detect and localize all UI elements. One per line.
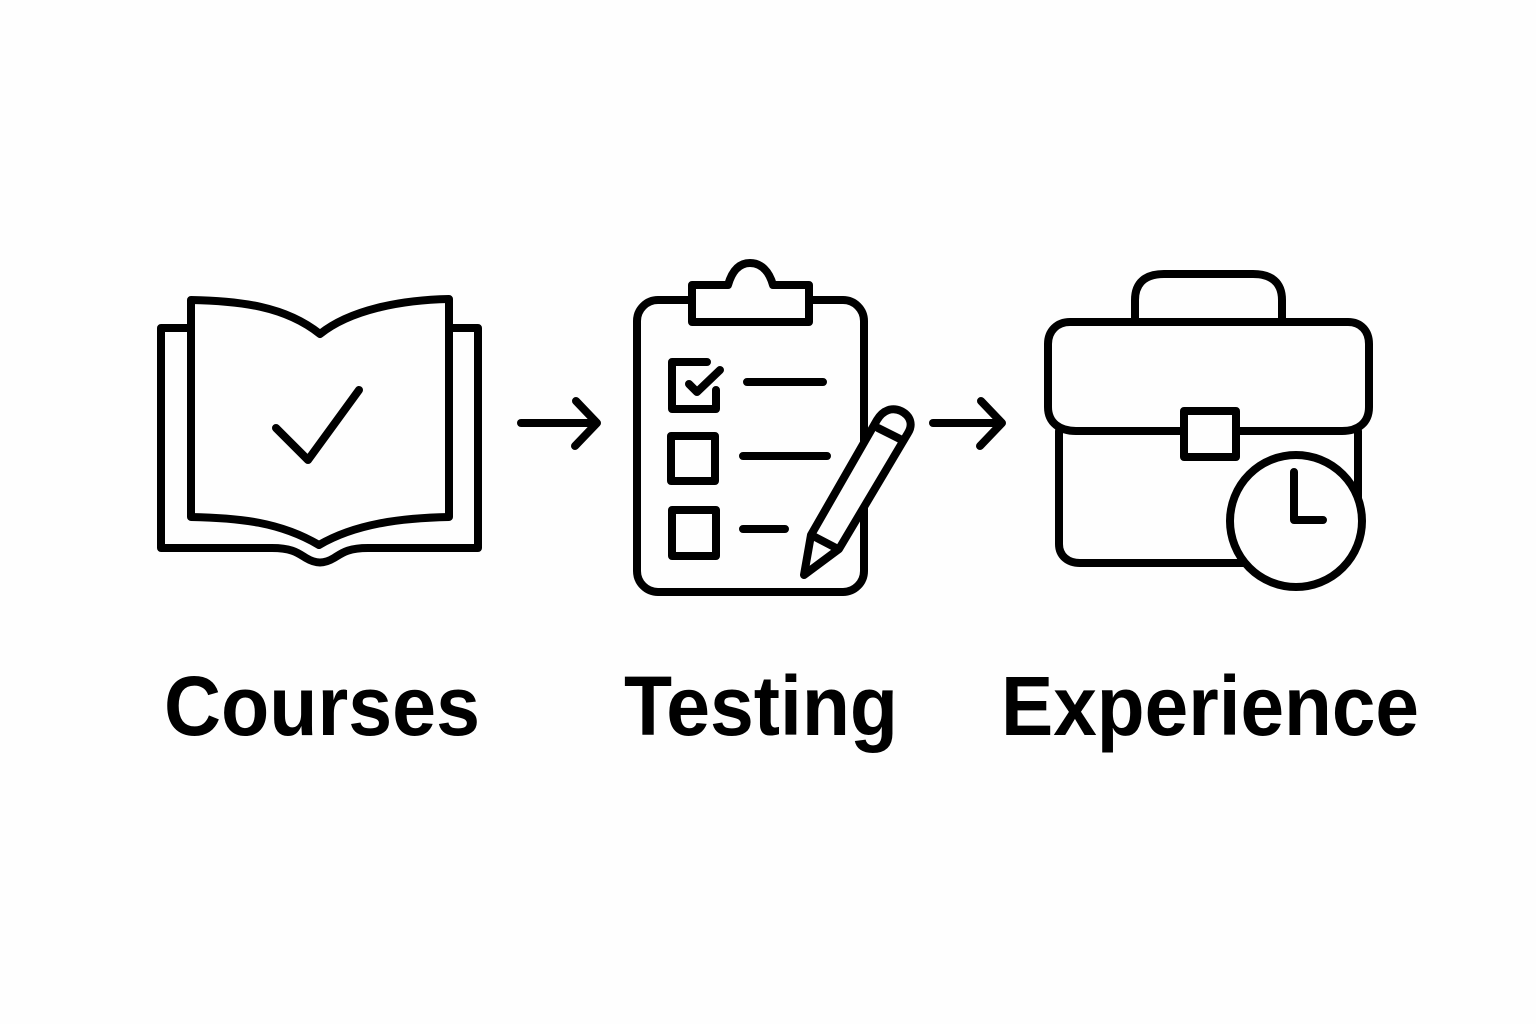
briefcase clasp — [1184, 411, 1236, 457]
clock hands — [1294, 472, 1323, 520]
checklist box 3 — [672, 510, 716, 556]
pencil bands — [815, 428, 900, 549]
clipboard body — [637, 300, 864, 592]
briefcase base — [1059, 431, 1358, 563]
icon: briefcase with clock — [1048, 274, 1369, 587]
icon: clipboard checklist with pencil — [637, 263, 911, 592]
pencil — [804, 409, 911, 575]
clock — [1230, 455, 1362, 587]
briefcase lid — [1048, 322, 1369, 431]
checklist box 2 — [671, 436, 715, 481]
back cover — [161, 328, 478, 562]
label: Courses: Courses — [164, 659, 480, 753]
arrow: courses to testing — [521, 401, 597, 446]
checked box — [672, 362, 716, 409]
checkmark — [276, 390, 359, 460]
checklist lines — [743, 382, 827, 529]
briefcase handle — [1135, 274, 1282, 322]
icon: open book with checkmark — [161, 299, 478, 562]
clipboard clip — [692, 263, 809, 322]
label: Experience: Experience — [1001, 659, 1419, 753]
pages — [191, 299, 449, 545]
label: Testing: Testing — [624, 659, 898, 753]
check tick — [689, 370, 720, 392]
arrow: testing to experience — [933, 401, 1002, 446]
